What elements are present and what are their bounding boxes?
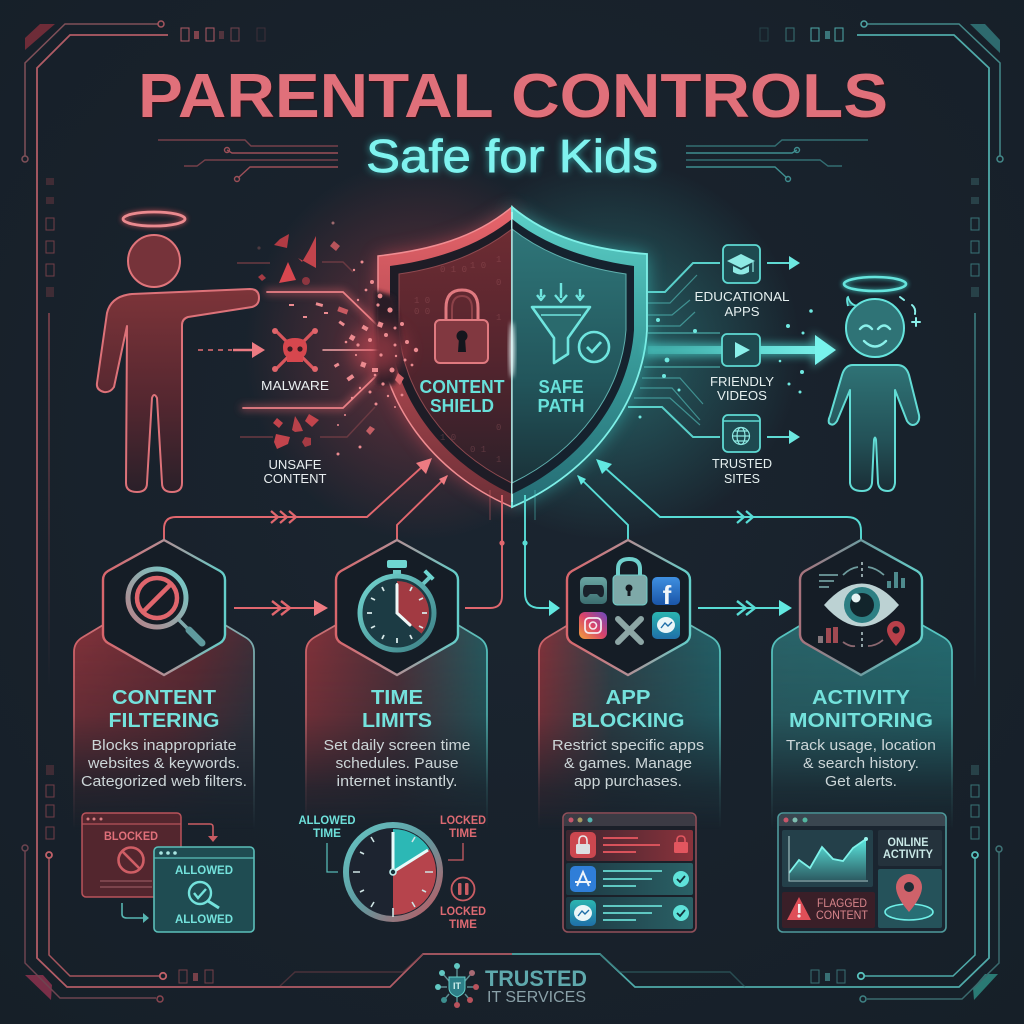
icon: filter funnel with check (532, 283, 609, 363)
description: schedules. Pause (336, 755, 458, 772)
alert: flagged content: FLAGGED (817, 896, 867, 910)
label: online activity: ONLINE (888, 837, 929, 849)
halo (123, 212, 185, 226)
binary code texture: 1 (496, 313, 501, 323)
logo icon (435, 963, 479, 1008)
arrow: trusted sites (767, 430, 800, 444)
connector: activity monitoring to shield (596, 459, 861, 540)
row: blocked app (566, 830, 693, 861)
description: Blocks inappropriate (92, 737, 236, 754)
connector: app blocking to monitoring (698, 600, 792, 616)
sparkle dots (638, 309, 813, 418)
description: Track usage, location (786, 737, 936, 754)
binary code texture: 0 1 0 (440, 265, 467, 275)
magnifier check (189, 882, 219, 908)
heading: CONTENT (112, 687, 216, 709)
description (786, 737, 936, 790)
connector: content filtering to time limits (234, 600, 328, 616)
heading: BLOCKING (572, 710, 684, 732)
head (847, 297, 858, 306)
connector: time limits up to shield base (465, 490, 505, 608)
line chart (782, 830, 873, 887)
icon: location pin (887, 621, 905, 646)
mini window: blocked (82, 813, 181, 897)
description: Set daily screen time (324, 737, 470, 754)
label: safe path (538, 377, 584, 416)
description: Categorized web filters. (81, 773, 247, 790)
label: trusted sites: TRUSTED (712, 456, 772, 471)
icon: camera app tile (579, 612, 607, 639)
panel: activity monitoring (786, 540, 936, 790)
heading (108, 687, 220, 732)
subtitle with glow: Safe for Kids (366, 130, 658, 182)
icon: messenger tile (652, 612, 680, 639)
icon: f app tile (652, 577, 680, 610)
chevrons (737, 511, 753, 523)
logo icon: IT (453, 981, 462, 991)
hexagon badge (103, 540, 225, 675)
description (324, 737, 470, 790)
connector: app blocking to shield (577, 475, 628, 540)
shield (350, 207, 647, 507)
title: PARENTAL CONTROLS (138, 62, 888, 131)
body (97, 289, 259, 492)
panel: content filtering (81, 540, 247, 790)
label: online activity: ACTIVITY (883, 849, 933, 861)
icon: f app tile: f (663, 580, 672, 610)
label: educational apps: APPS (724, 304, 760, 319)
allowed wedge (393, 829, 430, 872)
label: BLOCKED (104, 831, 158, 843)
heading: MONITORING (789, 710, 933, 732)
head (128, 235, 180, 287)
binary code texture: 0 0 (414, 307, 430, 317)
label: safe path: SAFE (538, 377, 584, 397)
label: allowed time (298, 815, 356, 872)
icon: block cross (618, 619, 641, 642)
circuit frame: left side (22, 21, 512, 1002)
connector: content filtering to shield (164, 458, 432, 540)
impact break in shield edge (374, 290, 403, 385)
subtitle with glow: Safe for Kids (366, 130, 658, 182)
binary code texture: 0 (496, 423, 501, 433)
binary code texture: 1 (496, 455, 501, 465)
label: locked time lower (440, 906, 486, 931)
description: & search history. (803, 755, 919, 772)
icon tile: educational apps (723, 245, 760, 283)
connector: shield to app blocking (522, 490, 560, 616)
label: friendly videos (710, 374, 774, 403)
connector: time limits to shield (397, 475, 448, 540)
heading (572, 687, 684, 732)
label: friendly videos: FRIENDLY (710, 374, 774, 389)
icon tile: friendly videos (722, 334, 760, 366)
logo tagline: IT SERVICES (487, 989, 586, 1006)
mini window: app list (563, 813, 696, 932)
flow arrow: return to allowed (122, 903, 149, 923)
description (81, 737, 247, 790)
heading: TIME (371, 687, 423, 709)
label: locked time upper (440, 815, 486, 860)
locked wedge (393, 849, 436, 915)
icon: stopwatch (360, 560, 435, 650)
figure: unprotected child (red) (97, 212, 259, 492)
icon: padlock (613, 559, 647, 605)
icon: eye (824, 584, 899, 626)
label: friendly videos: VIDEOS (717, 388, 767, 403)
label: locked time lower: LOCKED (440, 906, 486, 918)
shield left half (378, 207, 512, 507)
mini window: allowed (154, 847, 254, 932)
subtitle circuit: right (686, 140, 868, 182)
title: PARENTAL CONTROLS (139, 64, 889, 132)
sparkles (900, 297, 920, 326)
heading: APP (606, 687, 650, 709)
label: ALLOWED (175, 914, 233, 926)
binary code texture: 0 (496, 278, 501, 288)
icon: magnifier with prohibition (128, 569, 202, 643)
description: Get alerts. (825, 773, 897, 790)
panel: app blocking (552, 540, 704, 790)
heading: ACTIVITY (812, 687, 911, 709)
mini window: activity dashboard (778, 813, 946, 932)
description (552, 737, 704, 790)
heading (789, 687, 933, 732)
shards: upper threat cluster (237, 222, 353, 285)
label: content shield: CONTENT (420, 377, 504, 397)
hexagon badge (800, 540, 922, 675)
label: trusted sites (712, 456, 772, 486)
label: unsafe content: UNSAFE (268, 457, 322, 472)
flow arrow: blocked to allowed (188, 824, 218, 842)
arrow: educational apps (767, 256, 800, 270)
label: educational apps (694, 289, 790, 319)
shield right half (512, 207, 647, 507)
alert: flagged content (782, 892, 875, 928)
icon: game tile (580, 577, 607, 604)
label: content shield: SHIELD (430, 396, 494, 416)
label: allowed time: ALLOWED (298, 815, 356, 827)
chevrons (271, 511, 296, 523)
upper link to educational apps (648, 263, 720, 292)
circuit frame: right side (512, 21, 1003, 1002)
panel: time limits (324, 540, 470, 790)
figure: protected child (teal) (829, 277, 920, 491)
alert: flagged content: CONTENT (816, 908, 869, 922)
label: content shield (420, 377, 504, 416)
binary code texture: 0 1 (470, 445, 486, 455)
hexagon badge (336, 540, 458, 675)
map pin (878, 869, 942, 928)
label: safe path: PATH (538, 396, 584, 416)
feature cards backdrop (74, 625, 952, 830)
shield outer glow (512, 207, 647, 507)
description: Restrict specific apps (552, 737, 704, 754)
row: allowed messenger (566, 897, 693, 929)
icon tile: trusted sites (723, 415, 760, 452)
label: unsafe content: CONTENT (264, 471, 327, 486)
binary code texture (414, 255, 501, 465)
icon: padlock (435, 290, 488, 363)
threat arrow outline (243, 292, 403, 408)
label: locked time upper: LOCKED (440, 815, 486, 827)
teal ambient glow (420, 160, 800, 540)
heading (362, 687, 432, 732)
impact glow (350, 326, 406, 374)
prohibition sign (118, 848, 144, 872)
label: malware: MALWARE (261, 378, 329, 393)
label: locked time lower: TIME (449, 919, 477, 931)
binary code texture: 1 0 (470, 261, 486, 271)
centre seam glow (509, 212, 515, 502)
body (829, 365, 919, 491)
hexagon badge (567, 540, 690, 675)
subtitle circuit: left (158, 140, 338, 182)
label: locked time upper: TIME (449, 828, 477, 840)
heading: FILTERING (108, 710, 220, 732)
heading: LIMITS (362, 710, 432, 732)
description: app purchases. (574, 773, 682, 790)
halo (844, 277, 906, 291)
dashed arrow to malware (198, 342, 265, 358)
description: & games. Manage (564, 755, 692, 772)
label: trusted sites: SITES (724, 471, 760, 486)
main beam to child (645, 332, 840, 368)
logo: trusted IT services (435, 963, 587, 1008)
shards: lower threat cluster (240, 407, 375, 449)
description: internet instantly. (336, 773, 458, 790)
impact particles (289, 260, 418, 456)
logo wordmark: TRUSTED (485, 966, 587, 991)
label: unsafe content (264, 457, 327, 486)
binary code texture: 1 0 (440, 433, 456, 443)
description: websites & keywords. (87, 755, 240, 772)
binary code texture: 1 (496, 255, 501, 265)
label: online activity (878, 830, 942, 866)
label: educational apps: EDUCATIONAL (694, 289, 790, 304)
icon: pause (452, 878, 474, 900)
clock chart: allowed and locked time (346, 825, 440, 919)
icon: data marks (818, 562, 905, 650)
row: allowed app store (566, 863, 693, 895)
red ambient glow (245, 160, 595, 540)
label: ALLOWED (175, 865, 233, 877)
smiling face (860, 326, 890, 346)
teal circuit lines to safe apps (628, 263, 720, 437)
lower link to trusted sites (628, 407, 720, 437)
icon: malware skull (272, 328, 318, 372)
binary code texture: 1 0 (414, 296, 430, 306)
label: allowed time: TIME (313, 828, 341, 840)
